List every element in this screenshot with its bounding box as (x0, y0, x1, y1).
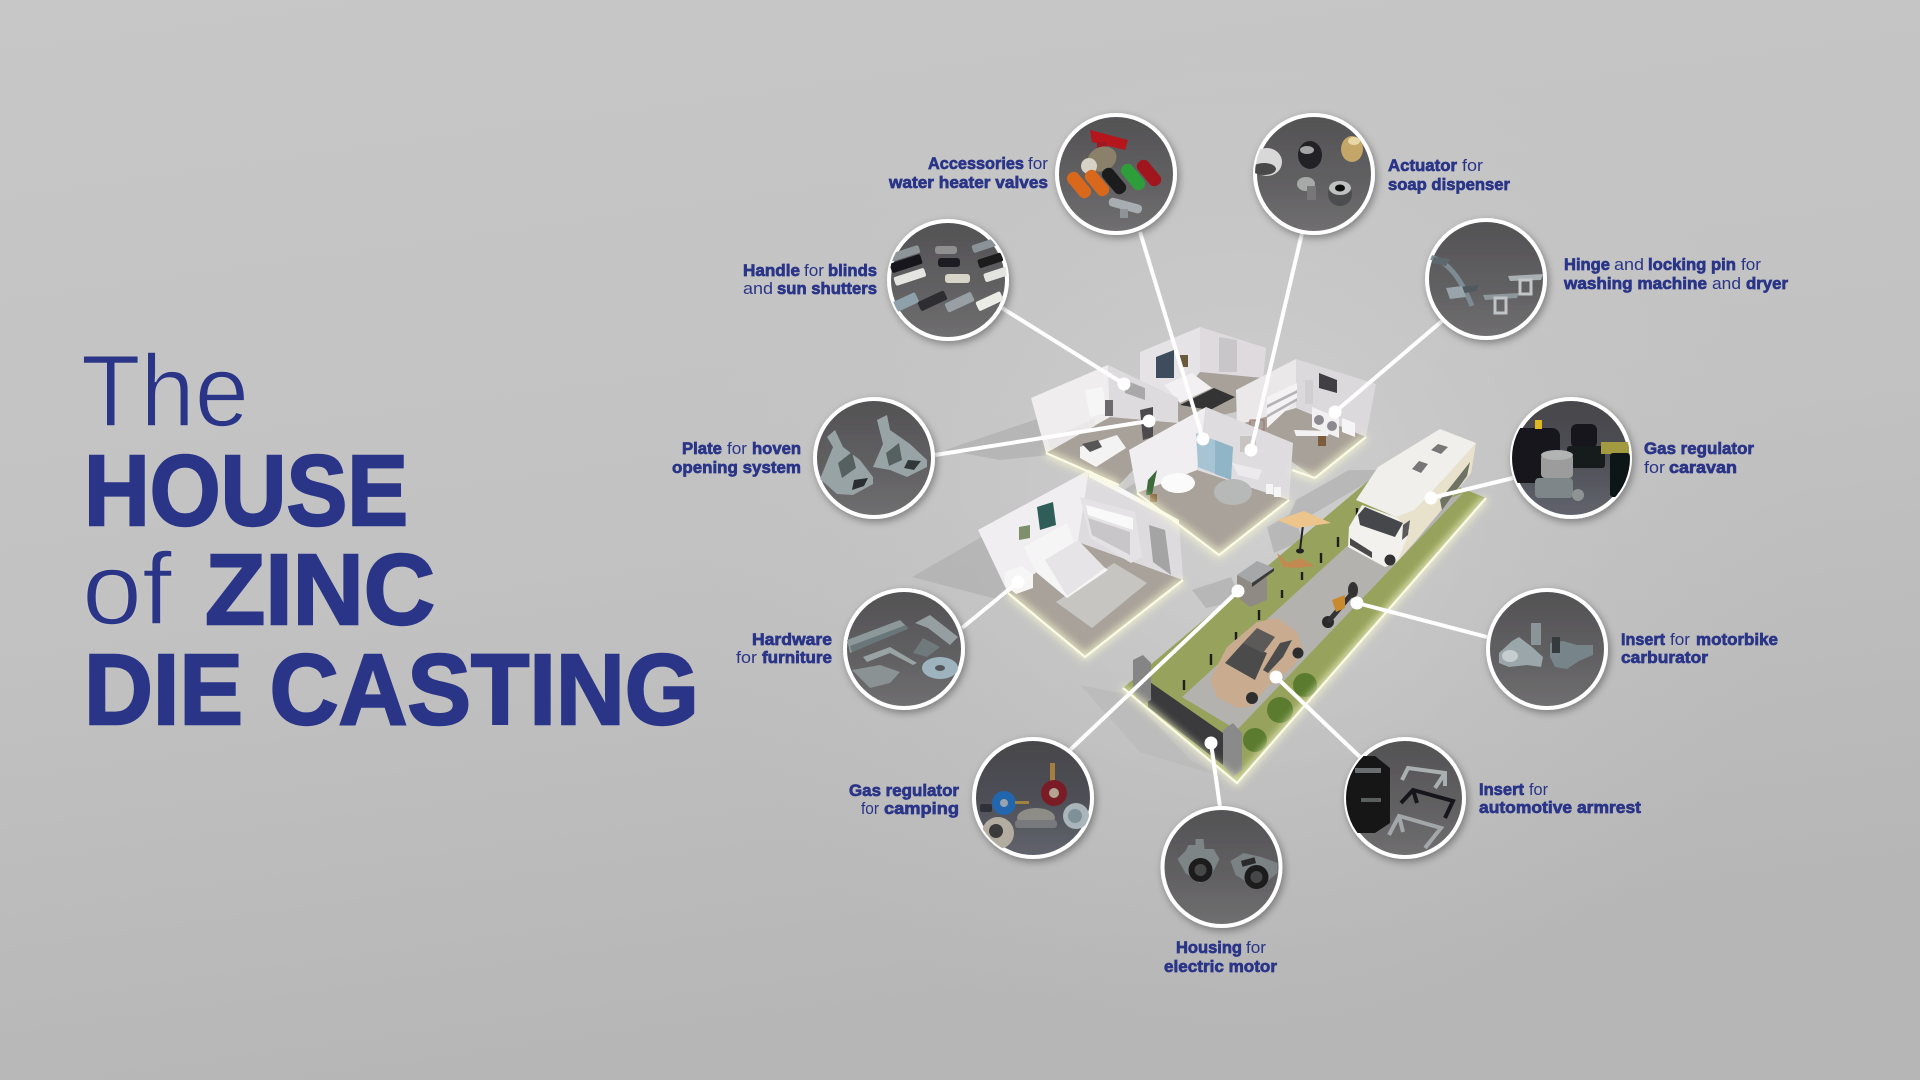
label: furniture (762, 648, 832, 667)
callout: actuator for soap dispenser (1252, 115, 1510, 233)
label: locking pin (1648, 255, 1736, 274)
label: soap dispenser (1388, 175, 1510, 194)
label: dryer (1746, 274, 1788, 293)
photo circle: actuators (1252, 115, 1373, 233)
label: for (1028, 154, 1048, 173)
callout: insert for motorbike carburator (1488, 590, 1778, 708)
lounger (1277, 553, 1315, 568)
label: for (1462, 156, 1483, 175)
room: front bedroom (978, 470, 1183, 657)
title: The (81, 334, 249, 448)
label: Hardware (752, 630, 832, 649)
label: automotive armrest (1479, 798, 1641, 817)
room: kitchen (1031, 365, 1178, 485)
label: washing machine (1563, 274, 1707, 293)
label: for (1644, 458, 1665, 477)
label (1644, 439, 1754, 477)
label: Insert (1621, 630, 1665, 649)
label: caravan (1669, 458, 1737, 477)
photo circle: plates (815, 399, 933, 517)
callout: hardware for furniture (736, 590, 963, 708)
callout: gas regulator for caravan (1511, 399, 1754, 517)
label: for (1246, 938, 1266, 957)
label (1621, 630, 1778, 667)
parasol (1277, 511, 1331, 554)
connector lines and anchor dots (935, 232, 1513, 807)
gate (1133, 655, 1242, 777)
label (1164, 938, 1277, 976)
label: for (861, 799, 879, 818)
label: Plate (682, 439, 722, 458)
label: for (1529, 780, 1548, 799)
car (1210, 618, 1304, 708)
label: and (1614, 255, 1644, 274)
barbecue (1237, 561, 1274, 607)
room: back bedroom (1140, 327, 1266, 424)
house and garden illustration (912, 327, 1486, 783)
photo circle: camping regulators (974, 739, 1092, 857)
label (849, 781, 959, 818)
label: carburator (1621, 648, 1708, 667)
photo circle: carburator inserts (1488, 590, 1606, 708)
label: Housing (1176, 938, 1242, 957)
garden lamps (1184, 508, 1357, 690)
label: hoven (752, 439, 801, 458)
label: blinds (828, 261, 877, 280)
label: motorbike (1696, 630, 1778, 649)
glowing floor edges (1008, 437, 1486, 783)
floor shadows (912, 418, 1388, 608)
title: DIE CASTING (84, 634, 699, 746)
label: Accessories (928, 154, 1024, 173)
label: Handle (743, 261, 800, 280)
camper (1348, 429, 1476, 567)
label: and (1712, 274, 1741, 293)
photo circle: hinges (1427, 220, 1545, 338)
callout: plate for oven opening system (672, 399, 933, 517)
callout: accessories for water heater valves (888, 115, 1175, 233)
photo circle: motor housings (1162, 808, 1280, 926)
callout: insert for automotive armrest (1345, 739, 1641, 857)
label: Hinge (1564, 255, 1610, 274)
label (888, 154, 1048, 192)
callout: housing for electric motor (1162, 808, 1280, 976)
label (672, 439, 801, 477)
label: for (1741, 255, 1761, 274)
title: of (82, 532, 173, 646)
gate shadow (1080, 685, 1232, 780)
label: for (727, 439, 747, 458)
callout: gas regulator for camping (849, 739, 1092, 857)
photo circle: armrest inserts (1345, 739, 1464, 857)
room: laundry (1236, 359, 1376, 478)
label: Actuator (1388, 156, 1457, 175)
label: camping (884, 799, 959, 818)
garden (1123, 429, 1486, 783)
label: for (804, 261, 824, 280)
label: Gas regulator (1644, 439, 1754, 458)
label: Gas regulator (849, 781, 959, 800)
photo circle: hardware (845, 590, 963, 708)
title: HOUSE (84, 435, 408, 547)
label (736, 630, 832, 667)
photo circle: caravan regulators (1511, 399, 1630, 517)
label (1563, 255, 1788, 293)
label: Insert (1479, 780, 1524, 799)
title: ZINC (205, 534, 435, 646)
label: electric motor (1164, 957, 1277, 976)
label (1388, 156, 1510, 194)
label (743, 261, 877, 298)
motorbike (1322, 582, 1358, 628)
label: sun shutters (777, 279, 877, 298)
label: and (743, 279, 773, 298)
callout: hinge and locking pin for washing machine and dryer (1427, 220, 1788, 338)
callout: handle for blinds and sun shutters (743, 221, 1009, 339)
label: for (1670, 630, 1690, 649)
bushes (1243, 673, 1317, 752)
label: opening system (672, 458, 801, 477)
photo circle: handles (887, 221, 1009, 339)
label: water heater valves (888, 173, 1048, 192)
label: for (736, 648, 757, 667)
photo circle: valve accessories (1057, 115, 1175, 233)
title (81, 334, 699, 746)
label (1479, 780, 1641, 817)
room: bathroom (1129, 407, 1293, 555)
